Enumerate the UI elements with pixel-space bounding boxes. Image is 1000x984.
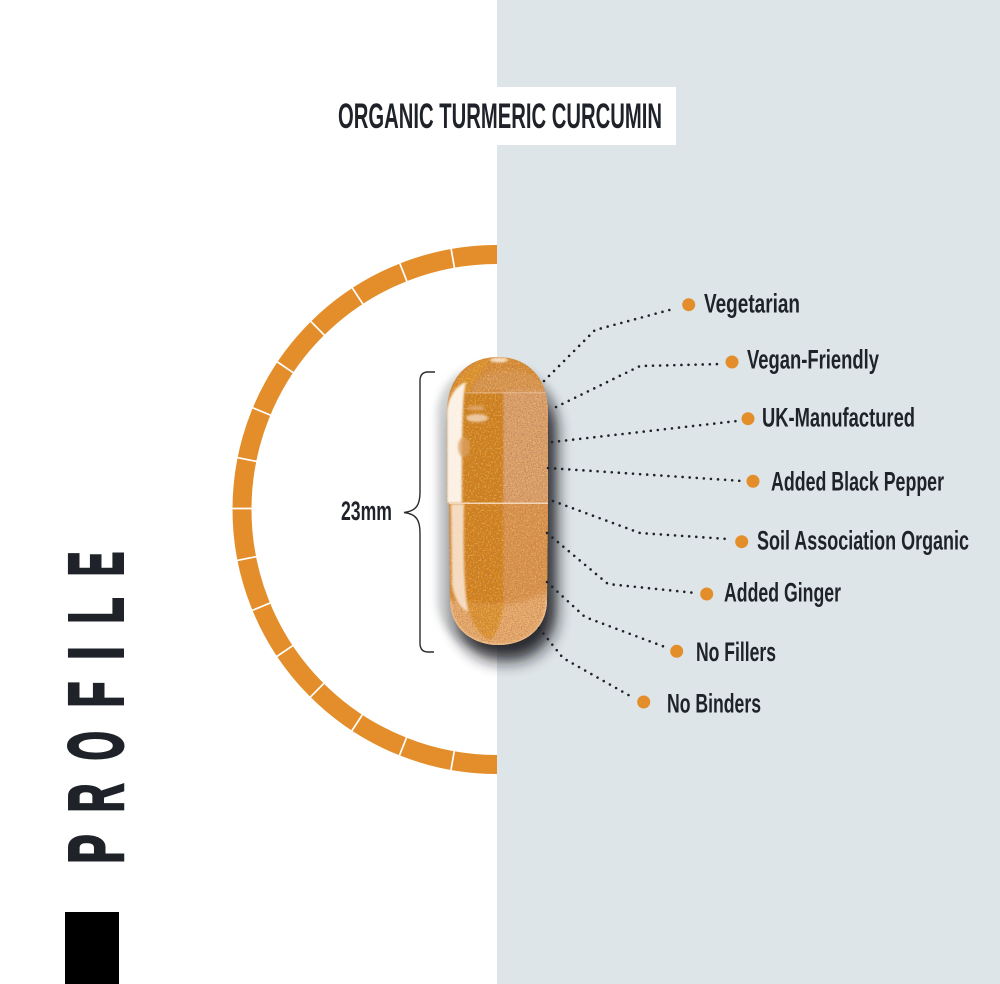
vertical heading: PROFILE: P	[54, 834, 140, 864]
soft colour bands	[445, 358, 550, 647]
connector: Soil Association Organic	[553, 501, 728, 539]
bottom cap orange crescent	[467, 600, 503, 640]
seam	[447, 502, 549, 504]
bottom cap peach	[450, 590, 548, 645]
white glare top half	[447, 382, 466, 503]
item: Vegetarian: Vegetarian	[704, 288, 800, 318]
shoulder band	[466, 392, 548, 394]
label: 23mm: 23mm	[341, 496, 392, 526]
item: No Fillers	[670, 637, 776, 667]
small glints	[466, 414, 488, 422]
right band, bottom half	[503, 504, 550, 614]
text: E	[54, 552, 140, 576]
connector: UK-Manufactured	[552, 421, 737, 442]
bottom rim	[450, 600, 547, 645]
connector: Added Black Pepper	[548, 468, 743, 481]
white glare bottom half	[451, 504, 468, 612]
item: No Binders: No Binders	[667, 688, 761, 718]
powder grain	[445, 355, 550, 647]
capsule shadow	[437, 365, 557, 661]
capsule body	[445, 355, 550, 647]
top cap dome	[470, 370, 548, 392]
panel: grey right side	[497, 0, 1000, 984]
right pale band, top half	[503, 388, 550, 504]
title: ORGANIC TURMERIC CURCUMIN	[338, 97, 662, 136]
item: Added Ginger: Added Ginger	[724, 578, 841, 608]
connector: No Binders	[539, 628, 632, 697]
item: Vegetarian	[682, 288, 800, 318]
connector: Added Ginger	[547, 533, 696, 593]
vertical heading: PROFILE: O	[54, 731, 140, 760]
item: Vegan-Friendly: Vegan-Friendly	[747, 344, 879, 374]
central orange band	[462, 392, 503, 504]
item: No Binders	[637, 688, 761, 718]
capsule with drop shadow	[437, 355, 557, 661]
connector: Vegan-Friendly	[556, 364, 721, 407]
vertical heading: PROFILE: R	[54, 784, 140, 812]
dotted connector lines	[539, 309, 743, 697]
chart: segmented orange half ring	[231, 247, 497, 771]
vertical heading: PROFILE	[54, 552, 140, 864]
list of capsule attributes	[637, 288, 969, 718]
item: UK-Manufactured	[742, 402, 915, 432]
item: Added Ginger	[700, 578, 841, 608]
vertical heading: PROFILE: I	[54, 646, 140, 660]
item: No Fillers: No Fillers	[696, 637, 776, 667]
connector: No Fillers	[547, 582, 665, 647]
connector: Vegetarian	[544, 309, 673, 381]
bracket: capsule length	[404, 372, 435, 652]
item: Added Black Pepper	[746, 466, 944, 496]
speck of reflection at top	[490, 358, 508, 362]
vertical heading: PROFILE: L	[54, 598, 140, 624]
item: UK-Manufactured: UK-Manufactured	[762, 402, 915, 432]
vertical heading: PROFILE: F	[54, 682, 140, 707]
title	[320, 87, 676, 145]
item: Vegan-Friendly	[726, 344, 879, 374]
black tab block	[65, 912, 119, 984]
